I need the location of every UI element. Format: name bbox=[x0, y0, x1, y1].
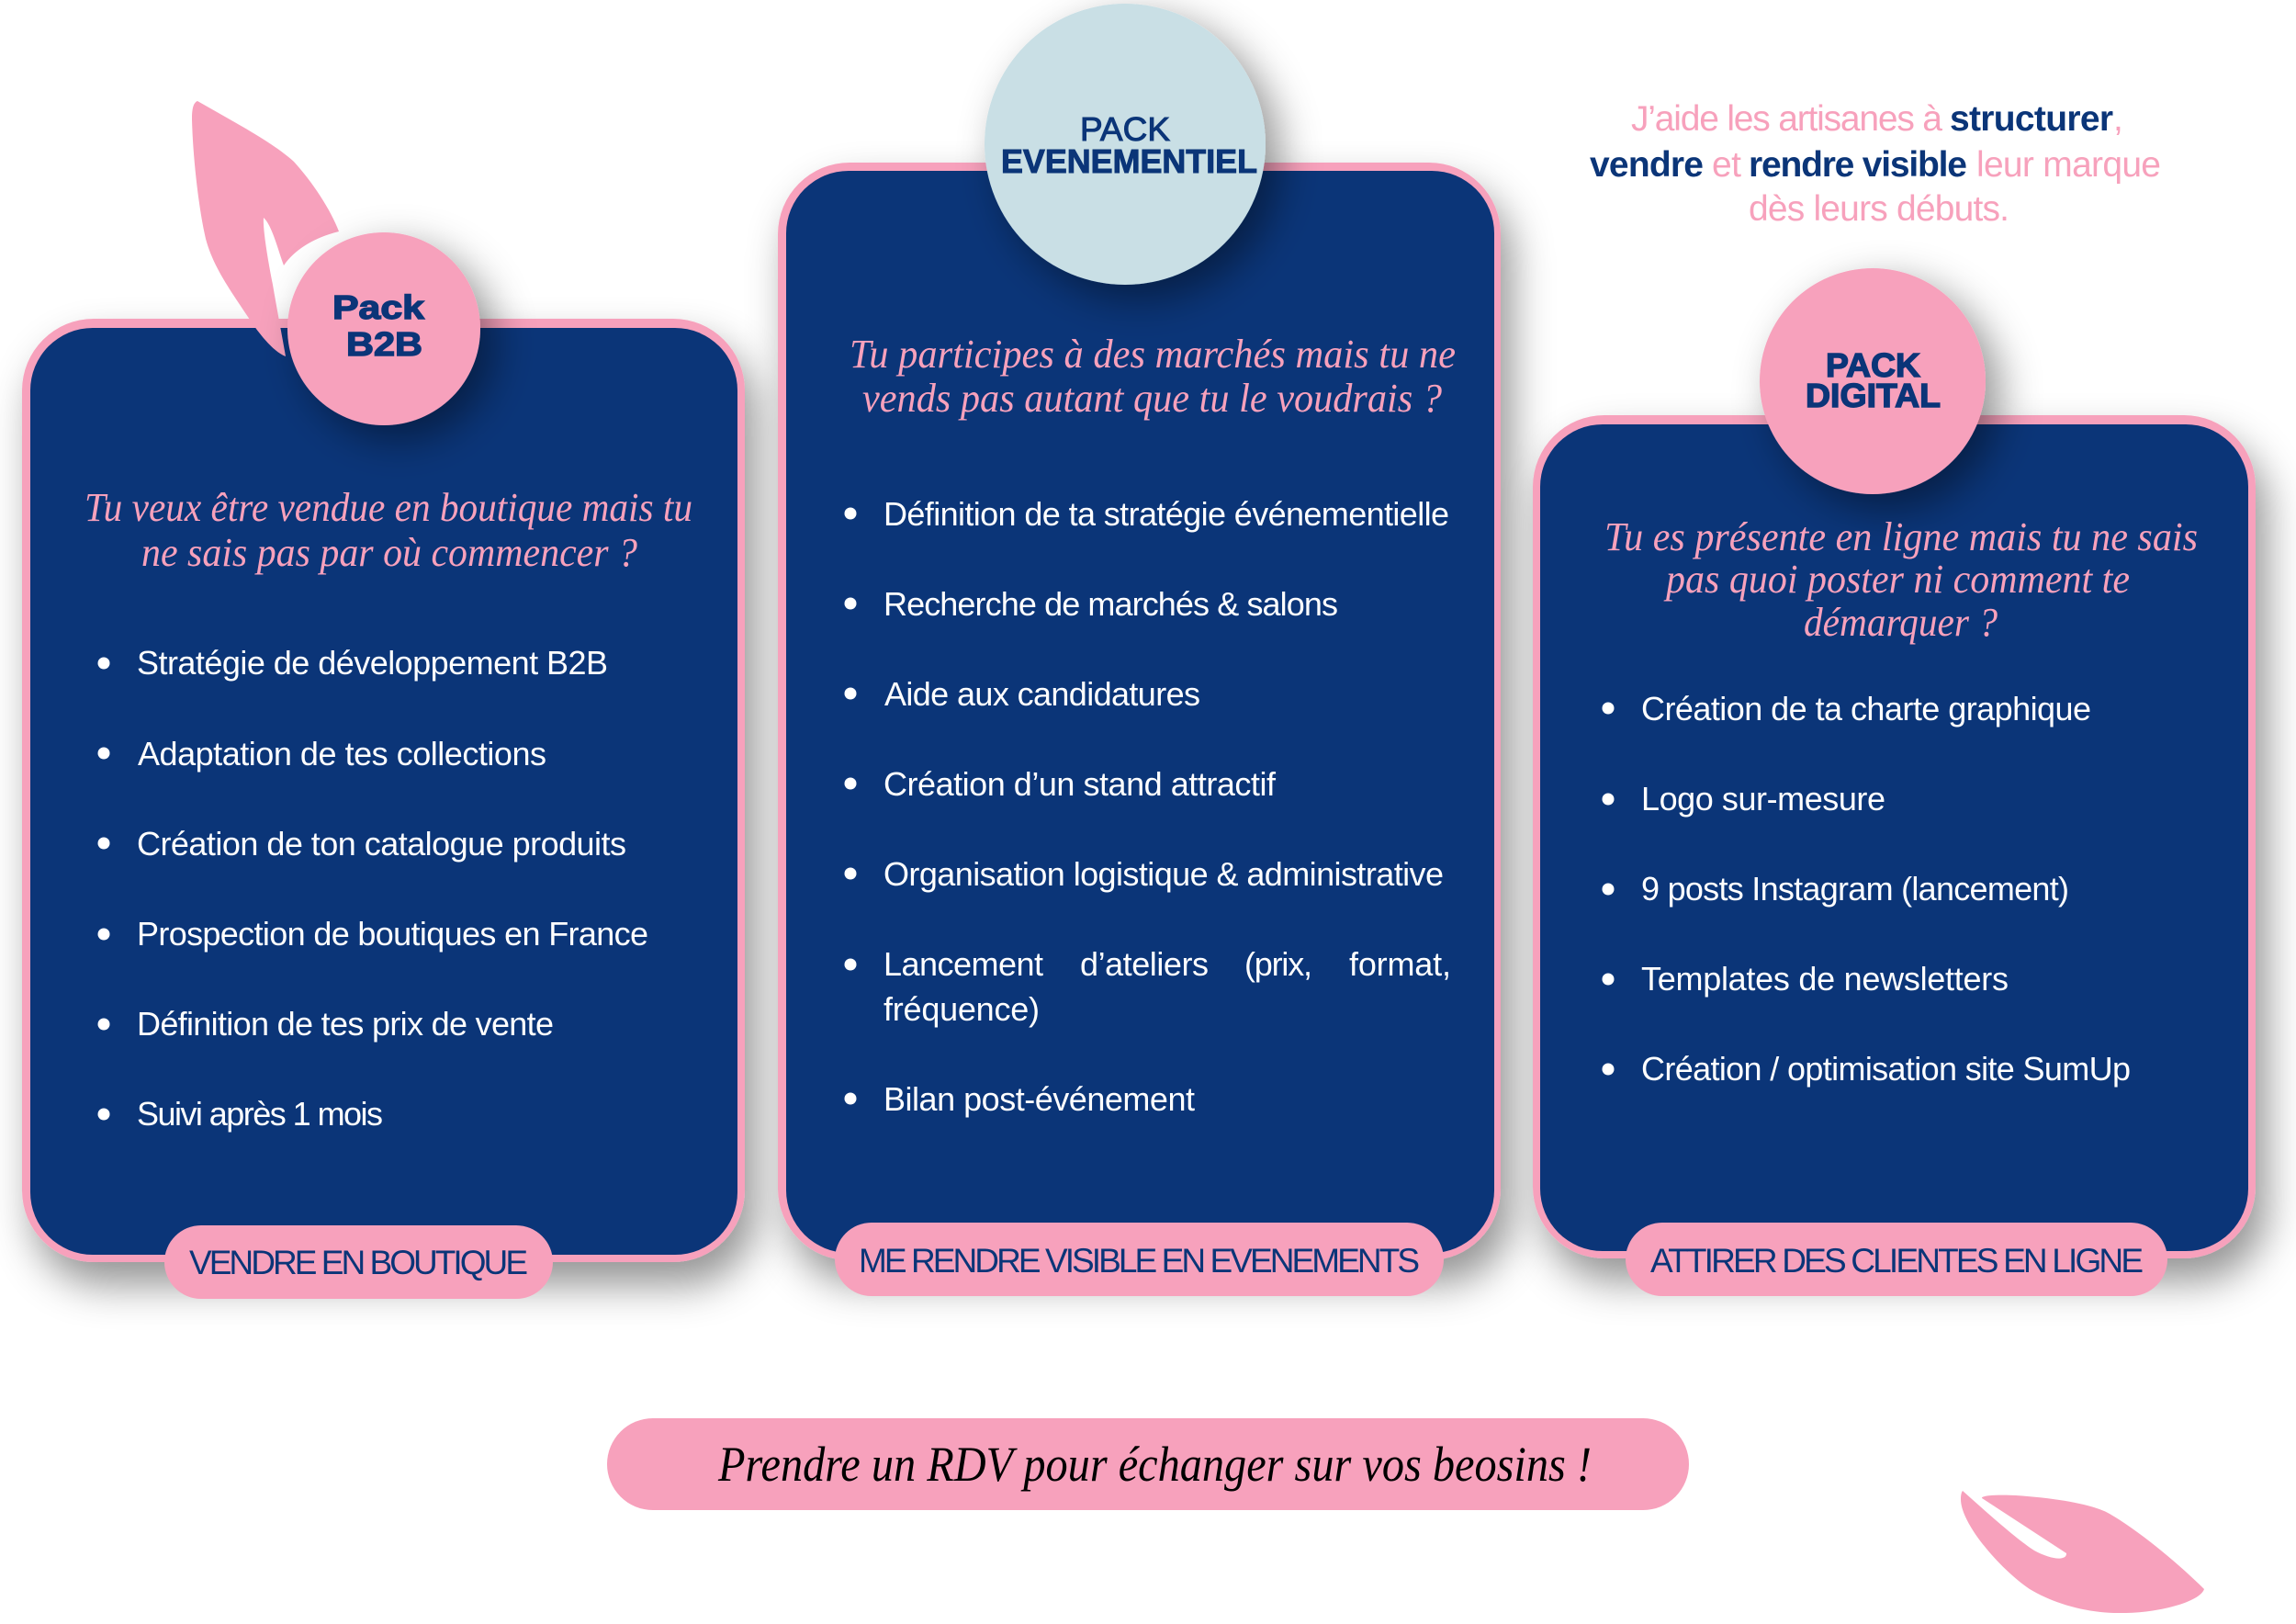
service list: Organisation logistique & administrative bbox=[884, 855, 1444, 893]
badge: pack evenementiel bbox=[985, 4, 1266, 285]
tagline: et bbox=[1712, 145, 1741, 185]
tagline: rendre visible bbox=[1749, 145, 1967, 185]
service list: Aide aux candidatures bbox=[884, 675, 1200, 713]
service list: Templates de newsletters bbox=[1641, 960, 2009, 998]
service list: Création de ta charte graphique bbox=[1641, 690, 2091, 727]
service list: Création d’un stand attractif bbox=[884, 765, 1277, 803]
question text: Tu es présente en ligne mais tu ne sais bbox=[1604, 514, 2198, 559]
question text bbox=[84, 485, 692, 575]
card background bbox=[1533, 415, 2256, 1258]
tagline: J’aide les artisanes à bbox=[1631, 99, 1942, 139]
tagline: structurer bbox=[1950, 99, 2113, 139]
service list bbox=[97, 644, 648, 1133]
service list: Bilan post-événement bbox=[884, 1080, 1195, 1118]
tagline: dès leurs débuts. bbox=[1749, 189, 2009, 229]
service list: Logo sur-mesure bbox=[1641, 780, 1885, 818]
card background bbox=[22, 319, 745, 1262]
tagline: vendre bbox=[1590, 145, 1704, 185]
badge: pack evenementiel: PACK bbox=[1080, 110, 1170, 148]
service list: d’ateliers bbox=[1080, 945, 1209, 983]
question text: vends pas autant que tu le voudrais ? bbox=[862, 376, 1442, 421]
call to action pill bbox=[607, 1418, 1689, 1510]
button: attirer des clientes: ATTIRER DES CLIENTES EN LIGNE bbox=[1650, 1242, 2144, 1280]
badge: pack digital: PACK bbox=[1826, 346, 1920, 384]
card background bbox=[778, 163, 1501, 1260]
service list: Recherche de marchés & salons bbox=[884, 585, 1338, 623]
service list: Création de ton catalogue produits bbox=[137, 825, 626, 863]
badge: pack evenementiel: EVENEMENTIEL bbox=[1001, 142, 1257, 180]
badge: Pack B2B bbox=[287, 232, 480, 425]
button: me rendre visible: ME RENDRE VISIBLE EN EVENEMENTS bbox=[859, 1242, 1420, 1280]
service list: format, bbox=[1349, 945, 1451, 983]
badge: pack digital bbox=[1760, 268, 1986, 494]
question text: Tu participes à des marchés mais tu ne bbox=[850, 332, 1456, 377]
service list: Création / optimisation site SumUp bbox=[1641, 1050, 2131, 1088]
button: vendre en boutique: VENDRE EN BOUTIQUE bbox=[189, 1244, 528, 1281]
panel: pack digital bbox=[1533, 268, 2256, 1296]
service list: Définition de ta stratégie événementielle bbox=[884, 495, 1449, 533]
service list: Suivi après 1 mois bbox=[137, 1095, 383, 1133]
question text bbox=[850, 332, 1456, 421]
badge: Pack B2B: Pack bbox=[332, 288, 425, 326]
service list: fréquence) bbox=[884, 990, 1040, 1028]
badge: Pack B2B: B2B bbox=[346, 325, 422, 363]
service list: Lancement bbox=[884, 945, 1043, 983]
service list: Définition de tes prix de vente bbox=[137, 1005, 554, 1043]
service list bbox=[1602, 690, 2131, 1088]
call to action pill: Prendre un RDV pour échanger sur vos beosins ! bbox=[717, 1437, 1592, 1492]
button: attirer des clientes bbox=[1626, 1223, 2167, 1296]
badge: pack digital: DIGITAL bbox=[1806, 377, 1941, 414]
button: vendre en boutique bbox=[164, 1225, 553, 1299]
tagline: , bbox=[2113, 99, 2123, 139]
icon: leaf top bbox=[192, 101, 339, 356]
icon: leaf bottom right bbox=[1961, 1491, 2204, 1613]
service list bbox=[845, 495, 1451, 1118]
panel: pack evenementiel bbox=[778, 4, 1501, 1296]
question text: ne sais pas par où commencer ? bbox=[141, 530, 637, 575]
service list: (prix, bbox=[1244, 945, 1312, 983]
service list: 9 posts Instagram (lancement) bbox=[1641, 870, 2069, 908]
panel: pack B2B bbox=[22, 101, 745, 1299]
button: me rendre visible bbox=[835, 1223, 1444, 1296]
service list: Prospection de boutiques en France bbox=[137, 915, 648, 953]
question text: pas quoi poster ni comment te bbox=[1663, 557, 2130, 602]
question text: Tu veux être vendue en boutique mais tu bbox=[84, 485, 692, 530]
service list: Adaptation de tes collections bbox=[138, 735, 546, 773]
question text bbox=[1604, 514, 2198, 645]
question text: démarquer ? bbox=[1804, 600, 1998, 645]
tagline: leur marque bbox=[1976, 145, 2161, 185]
service list: Stratégie de développement B2B bbox=[137, 644, 608, 682]
tagline bbox=[1590, 99, 2161, 229]
